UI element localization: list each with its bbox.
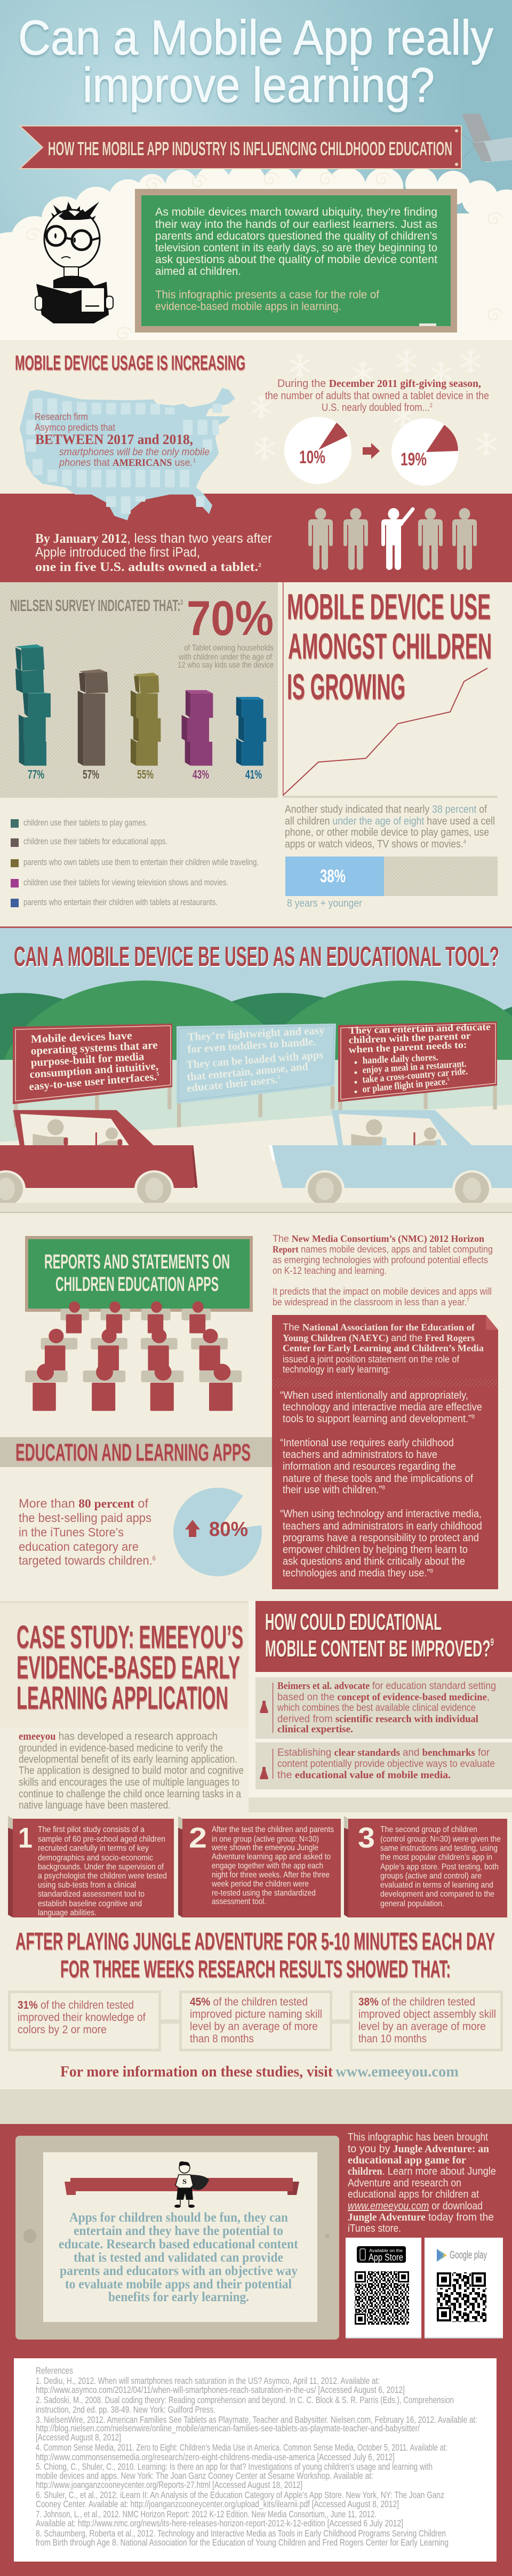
card: NAEYC statement: programs have a responsibility to protect and [283,1532,479,1544]
text: closing statement: educate. Research based educational content [59,2236,298,2252]
card: NAEYC statement: nature of these tools and the implications of [283,1473,473,1485]
text: closing statement: benefits for early learning. [108,2289,249,2304]
panel: red band [0,494,512,582]
map text: phones that AMERICANS use. [59,457,194,469]
card: NAEYC statement: The National Association for the Education of [283,1322,475,1333]
card: NAEYC statement: empower children by helping them learn to [283,1544,468,1556]
road strip [0,1203,512,1213]
pie: 80% [173,1488,262,1576]
chalkboard: reports heading: CHILDREN EDUCATION APPS [55,1273,219,1296]
panel: how could content be improved: the educational value of mobile media. [277,1770,451,1781]
pie: 19%: 19% [401,449,427,470]
text: more information link [60,2064,459,2080]
card: study step 2: Adventure learning app and asked to [212,1852,331,1861]
text: brought to you by: educational apps for children at [348,2189,479,2200]
panel: how could content be improved: 9 [491,1637,494,1648]
panel: references: http://www.joanganzcooneycenter.org/Reports-27.html [Accessed August 18, 2012] [36,2479,302,2490]
text: emeeyou research approach [19,1731,244,1811]
results boxes [10,1992,501,2050]
billboard 2: for even toddlers to handle. [187,1035,316,1056]
badge: App Store: Available on the [369,2248,403,2253]
panel: how could content be improved: Beimers et al. advocate for education standard setting [277,1681,496,1692]
text: emeeyou research approach: native language have been mastered. [19,1800,171,1811]
text: brought to you by: This infographic has been brought [348,2131,488,2143]
text: emeeyou research approach: The application is designed to build motor and cognitive [19,1765,244,1777]
map text: Research firm [35,411,88,422]
panel: how could content be improved: based on the concept of evidence-based medicine, [277,1692,490,1703]
heading: device use growing: IS GROWING [287,667,405,707]
panel: Nielsen survey [0,582,278,798]
card: study step 1: demographics and socio-economic [38,1853,153,1862]
result: 45%: 45% of the children tested [190,1996,308,2008]
card: study step 1: using sub-tests from a clinical [38,1881,136,1890]
panel: references: Cooney Center. Available at: http://joanganzcooneycenter.org/upload_kits/ilearnii.pdf [Accessed August 8, 2012] [36,2499,399,2510]
legend: parents who own tablets use them to entertain their children while traveling. [23,857,259,867]
text: January 2012: Apple introduced the first iPad, [35,545,200,560]
bar labels: 77% [28,767,44,781]
card: App Store QR [346,2238,421,2339]
billboard posts [14,1084,497,1127]
card: study step 1: standardized assessment tool to [38,1890,145,1899]
snowflakes [252,351,495,459]
panel: how could content be improved: Establishing clear standards and benchmarks for [277,1747,490,1758]
pie: 10% [284,417,351,484]
card: NAEYC statement: Center for Early Learning and Children’s Media [283,1343,484,1353]
billboard 3: enjoy a meal in a restaurant. [362,1059,467,1076]
text: brought to you by: iTunes store. [348,2223,401,2234]
text: another study: phone, or other mobile device to play games, use [285,827,489,838]
ribbon [65,2178,299,2195]
panel: references: 7. Johnson, L., et al., 2012. NMC Horizon Report: 2012 K-12 Edition. New Media Consortium,, June 11, 2012. [36,2509,377,2519]
panel: case study: CASE STUDY: EMEEYOU’S [17,1619,243,1655]
text: December 2011: U.S. nearly doubled from... [322,402,449,414]
text: NMC Horizon report: as emerging technologies with profound potential effects [273,1255,488,1265]
progress bar: 38%: 8 years + younger [287,898,362,909]
map text: BETWEEN 2017 and 2018, [35,432,193,447]
text: another study: Another study indicated that nearly 38 percent of [285,804,487,815]
text: another study [285,804,495,850]
card: NAEYC statement: tools to support learning and development.” [283,1413,488,1425]
panel: how could content be improved [249,1601,512,1812]
billboard 1: operating systems that are [30,1039,158,1057]
tablet [15,2136,339,2340]
card: study step 1: backgrounds. Under the supervision of [38,1862,164,1872]
card: study step 3: development and compared to the [380,1890,494,1899]
result: 38%: improved object assembly skill [358,2008,496,2020]
card: NAEYC statement: teachers and administrators in early childhood [283,1520,482,1532]
panel: main background middle [0,582,512,927]
result: 38%: level by an average of more [358,2020,486,2033]
legend [11,818,259,907]
text: 80 percent [19,1496,156,1567]
pie: 19% [391,418,459,486]
card: study step 2 [178,1816,341,1917]
text: closing statement: Apps for children should be fun, they can [69,2209,288,2225]
card: NAEYC statement: teachers and administrators to have [283,1449,437,1461]
legend: children use their tablets for educational apps. [23,836,167,846]
panel: how could content be improved: which combines the best available clinical evidence [277,1702,476,1714]
bar labels: 57% [83,767,99,781]
heading band: education and learning apps [0,1437,272,1467]
panel: references: http://www.commonsensemedia.org/research/zero-eight-childrens-media-use-america [Accessed July 6, 2012] [36,2452,395,2462]
arrow [363,443,380,459]
text: closing statement: to evaluate mobile apps and their potential [65,2276,292,2292]
panel: references: mobile devices and apps. New York: The Joan Ganz Cooney Center at Sesame Workshop. Available at: [36,2470,373,2481]
card: study step 2: 2 [189,1822,207,1854]
billboard 2: 5 [277,1074,281,1080]
pie: 80%: 80% [209,1518,248,1541]
heading: Nielsen: 3 [180,598,183,606]
text: another study: 4 [463,839,466,845]
panel: case study: LEARNING APPLICATION [17,1680,228,1716]
panel: references: http://blog.nielsen.com/nielsenwire/online_mobile/american-families-see-tablets-as-playmate-teacher-and-babysitter/ [36,2423,420,2434]
billboard 2 [177,1024,336,1104]
title: improve learning? [83,58,435,113]
hills [0,980,512,1200]
panel: usage background [0,340,512,494]
card: study step 3: The second group of children [380,1825,477,1834]
result: 31%: improved their knowledge of [18,2011,146,2024]
map text: 1 [193,458,196,464]
panel: references: Available at: http://www.nmc.org/news/its-here-releases-horizon-report-2012-k-12-edition [Accessed 6 July 2012] [36,2518,403,2529]
text: NMC Horizon report: It predicts that the impact on mobile devices and apps will [273,1286,492,1297]
text: brought to you by [348,2131,496,2234]
text: closing statement: parents and educators with an objective way [60,2263,298,2278]
caption: 70%: 12 who say kids use the device [178,661,274,670]
badge: App Store [357,2246,406,2263]
badge: Google play [437,2249,487,2262]
card: study step 2: in one group (active group: N=30) [212,1835,319,1844]
card: study step 2: were shown the emeeyou Jungle [211,1843,318,1852]
card: NAEYC statement: issued a joint position statement on the role of [283,1354,460,1365]
text: another study: all children under the age of eight have used a cell [285,815,495,827]
panel: references: http://www.asymco.com/2012/04/11/when-will-smartphones-reach-saturation-in-the-us/ [Accessed August 6, 2012] [36,2384,405,2395]
card: Google Play QR [425,2238,503,2339]
text: closing statement: that is tested and validated can provide [74,2249,283,2265]
text: more information link: www.emeeyou.com [335,2064,459,2080]
map text [35,411,210,469]
billboard 1: 5 [156,1071,159,1077]
card: study step 1: establish baseline cognitive and [38,1899,142,1908]
card: study step 2: night for three weeks. After the three [212,1870,330,1880]
card: study step 3: the most popular children’s app in [380,1853,492,1862]
billboard 1: purpose-built for media [30,1050,145,1069]
heading band: education and learning apps: EDUCATION AND LEARNING APPS [15,1439,251,1466]
text: NMC Horizon report: The New Media Consortium’s (NMC) 2012 Horizon [273,1233,484,1245]
card: NAEYC statement: ask questions and think critically about the [283,1556,465,1567]
billboard 3: They can entertain and educate [349,1022,491,1036]
sky background [0,0,512,342]
text: NMC Horizon report: Report names mobile devices, apps and tablet computing [273,1244,493,1255]
panel: lower page background [0,1213,512,2089]
billboard 3: or plane flight in peace. [362,1075,461,1095]
card: study step 1: The first pilot study consists of a [38,1825,145,1834]
map text: smartphones will be the only mobile [59,447,210,458]
car: blue [269,1110,512,1188]
result: 31%: 31% of the children tested [18,1999,134,2011]
card: study step 2: re-tested using the standardized [212,1889,316,1898]
bar chart: stacked blocks [15,644,266,766]
card: NAEYC statement: their use with children.” [283,1484,393,1496]
billboard 1: easy-to-use user interfaces. [28,1070,157,1093]
text: brought to you by: children. Learn more about Jungle [348,2166,496,2177]
text: closing statement: entertain and they have the potential to [74,2223,283,2238]
stat: 70%: 70% [187,591,274,646]
result: 38% [358,1996,496,2045]
billboard 2: They can be loaded with apps [186,1048,324,1071]
result: 31%: colors by 2 or more [18,2024,107,2036]
text: 80 percent: More than 80 percent of [19,1496,149,1510]
card: NAEYC statement: 8 [430,1568,433,1574]
text: December 2011: During the December 2011 gift-giving season, [277,378,481,390]
result: 45%: improved picture naming skill [190,2008,322,2020]
chalkboard: introduction: aimed at children. [155,265,241,278]
QR code 1 [354,2271,410,2326]
icon: five people, one highlighted [308,508,477,570]
card: study step 3: general population. [380,1899,444,1908]
panel: case study [0,1601,255,1797]
heading: usage: MOBILE DEVICE USAGE IS INCREASING [15,352,245,375]
text: NMC Horizon report: on K-12 teaching and learning. [273,1265,387,1276]
panel: case study: EVIDENCE-BASED EARLY [17,1650,240,1685]
text: emeeyou research approach: developmental benefit of its early learning application. [19,1754,237,1765]
panel: references: 1. Dediu, H., 2012. When will smartphones reach saturation in the US? Asymco, April 11, 2012. Available at: [36,2375,380,2386]
card: NAEYC statement: technologies and media they use.” [283,1567,445,1579]
map text: Asymco predicts that [35,422,115,433]
text: brought to you by: Jungle Adventure today from the [348,2212,494,2223]
legend: children use their tablets for viewing television shows and movies. [23,877,228,887]
title [18,11,493,113]
illustration: classroom students [25,1301,242,1411]
heading: results [15,1928,495,1983]
panel: how could content be improved: clinical expertise. [277,1724,353,1735]
chalkboard: introduction: parents and educators questioned the quality of children’s [155,230,437,242]
card: NAEYC statement: information and resources regarding the [283,1461,456,1472]
card: study step 1: sample of 60 pre-school aged children [38,1835,165,1844]
card: study step 2: assessment tool. [212,1897,266,1906]
wheels [0,1170,492,1208]
billboard 1: consumption and intuitive, [29,1059,159,1081]
progress bar: 38%: 38% [320,866,346,886]
text: January 2012: 2 [258,562,262,568]
ground and road [0,1060,512,1212]
card: study step 3: same instructions and testing, using [380,1844,498,1853]
panel: references: [Accessed August 8, 2012] [36,2432,121,2443]
badge: Google play: Google play [450,2249,487,2261]
result: 45% [190,1996,322,2045]
card: study step 1 [8,1816,174,1917]
card: NAEYC statement: 8 [382,1485,385,1491]
banner [20,126,461,169]
result: 38%: 38% of the children tested [358,1996,475,2008]
text: 80 percent: in the iTunes Store’s [19,1525,124,1539]
caption: 70%: of Tablet owning households [184,644,274,653]
billboard 1: Mobile devices have [30,1029,132,1045]
progress bar: 38% [285,857,498,909]
text: 80 percent: the best-selling paid apps [19,1511,151,1525]
card: study step 3: groups (active and control) are [380,1872,482,1881]
text: December 2011: the number of adults that owned a tablet device in the [265,390,489,402]
text: emeeyou research approach: skills and encourages the use of multiple languages to [19,1777,239,1788]
billboard 3 [338,1021,497,1102]
billboard 2: that entertain, amuse, and [186,1060,309,1083]
billboard 2: They’re lightweight and easy [187,1024,325,1043]
billboard 3: children with the parent or [348,1031,471,1046]
legend: children use their tablets to play games. [23,818,148,828]
heading: device use growing [287,586,492,707]
text: brought to you by: Adventure and research on [348,2177,461,2189]
chalkboard: introduction: As mobile devices march toward ubiquity, they’re finding [155,206,437,218]
text: January 2012: one in five U.S. adults owned a tablet. [35,560,240,574]
card: study step 2: week period the children were [211,1880,309,1889]
text: 80 percent: education category are [19,1540,139,1553]
result: 38%: than 10 months [358,2033,427,2045]
panel: how could content be improved: content potentially provide objective ways to evaluate [277,1758,495,1770]
panel: landscape sky [0,926,512,1067]
text: brought to you by: www.emeeyou.com or download [348,2200,483,2212]
legend: parents who entertain their children with tablets at restaurants. [23,897,218,907]
text: December 2011 [265,378,489,414]
text: 80 percent: 6 [153,1555,156,1562]
text: emeeyou research approach: emeeyou has developed a research approach [19,1731,218,1742]
chalkboard: introduction: evidence-based mobile apps in learning. [155,300,341,313]
card: NAEYC statement: technology in early learning: [283,1364,390,1375]
billboard 3: take a cross-country car ride. [362,1066,468,1085]
text: December 2011: 2 [430,402,433,409]
badge: App Store: App Store [369,2252,403,2263]
chalkboard: introduction: their way into the hands of our earliest learners. Just as [155,218,437,231]
card: study step 3: evaluated in terms of learning and [380,1881,493,1890]
US map [20,388,235,520]
bar labels [28,767,262,781]
illustration: superhero boy [174,2161,209,2208]
panel: references: instruction, 2nd ed. pp. 38-49. New York: Guilford Press. [36,2404,215,2415]
card: study step 1: recruited carefully in terms of key [38,1844,149,1853]
card: NAEYC statement [272,1315,498,1589]
text: another study: apps or watch videos, TV shows or movies. [285,838,490,850]
chalkboard: reports heading [25,1236,253,1312]
text: 80 percent: targeted towards children. [19,1553,160,1567]
text: brought to you by: educational app game for [348,2154,466,2166]
illustration: superhero boy: S [182,2177,187,2185]
chart: growing line [283,582,498,798]
bar labels: 41% [245,767,262,781]
chalkboard: introduction [135,189,457,332]
result: 31% [18,1999,146,2036]
card: NAEYC statement: “When using technology and interactive media, [280,1508,482,1520]
pie: 10%: 10% [299,447,325,467]
panel: references [14,2358,497,2562]
text: brought to you by: to you by Jungle Adventure: an [348,2143,489,2155]
caption: 70% [178,644,274,670]
text: January 2012 [35,531,272,574]
card: study step 3 [344,1816,507,1917]
illustration: boy reading [35,202,113,323]
billboard 1 [13,1024,172,1104]
plane tail [458,114,512,164]
car: red [0,1110,198,1188]
heading: Nielsen: NIELSEN SURVEY INDICATED THAT: [10,596,298,615]
card: study step 1: a psychologist the children were tested [38,1872,167,1881]
bar labels: 43% [193,767,209,781]
text: NMC Horizon report: 7 [467,1297,469,1303]
text: closing statement [59,2209,298,2304]
card: NAEYC statement: technology and interactive media are effective [283,1401,482,1413]
card: study step 3: 3 [358,1822,375,1854]
card: NAEYC statement: 8 [471,1414,475,1420]
text: emeeyou research approach: grounded in evidence-based medicine to verify the [19,1742,223,1754]
card: NAEYC statement: Young Children (NAEYC) and the Fred Rogers [283,1333,475,1344]
chalkboard: reports heading: REPORTS AND STATEMENTS ON [44,1251,230,1273]
chalkboard: introduction: ask questions about the quality of mobile device content [155,253,437,266]
text: more information link: For more information on these studies, visit [60,2064,333,2080]
bar labels: 55% [137,767,154,781]
text: NMC Horizon report: be widespread in the classroom in less than a year. [273,1297,490,1307]
chalkboard: introduction: This infographic presents a case for the role of [155,289,379,301]
text: emeeyou research approach: continue to challenge the child once learning tasks in a [19,1788,242,1800]
billboard 3: 5 [447,1076,450,1082]
panel: how could content be improved: derived from scientific research with individual [277,1714,478,1725]
clouds [0,163,512,342]
billboard 2: educate their users. [186,1073,280,1095]
card: study step 2: After the test the children and parents [212,1825,334,1834]
chalkboard: introduction: television content in its early days, so are they beginning to [155,242,437,254]
text: NMC Horizon report [273,1233,493,1307]
card: NAEYC statement: “Intentional use requires early childhood [280,1437,454,1449]
card: study step 1: 1 [18,1822,33,1854]
QR code 2 [436,2272,487,2323]
result: 45%: level by an average of more [190,2020,318,2033]
billboard 3: handle daily chores. [362,1052,438,1066]
card: NAEYC statement: “When used intentionally and appropriately, [280,1390,468,1401]
billboard 3: when the parent needs to: [348,1040,467,1056]
caption: 70%: with children under the age of [178,653,272,662]
panel: footer [0,2124,512,2576]
card: study step 2: engage together with the app each [212,1861,323,1870]
text: January 2012: By January 2012, less than two years after [35,531,272,546]
panel: references: References [36,2365,73,2376]
card: study step 1: language abilities. [38,1908,97,1917]
band: grey divider [0,2089,512,2124]
result: 45%: than 8 months [190,2033,254,2045]
